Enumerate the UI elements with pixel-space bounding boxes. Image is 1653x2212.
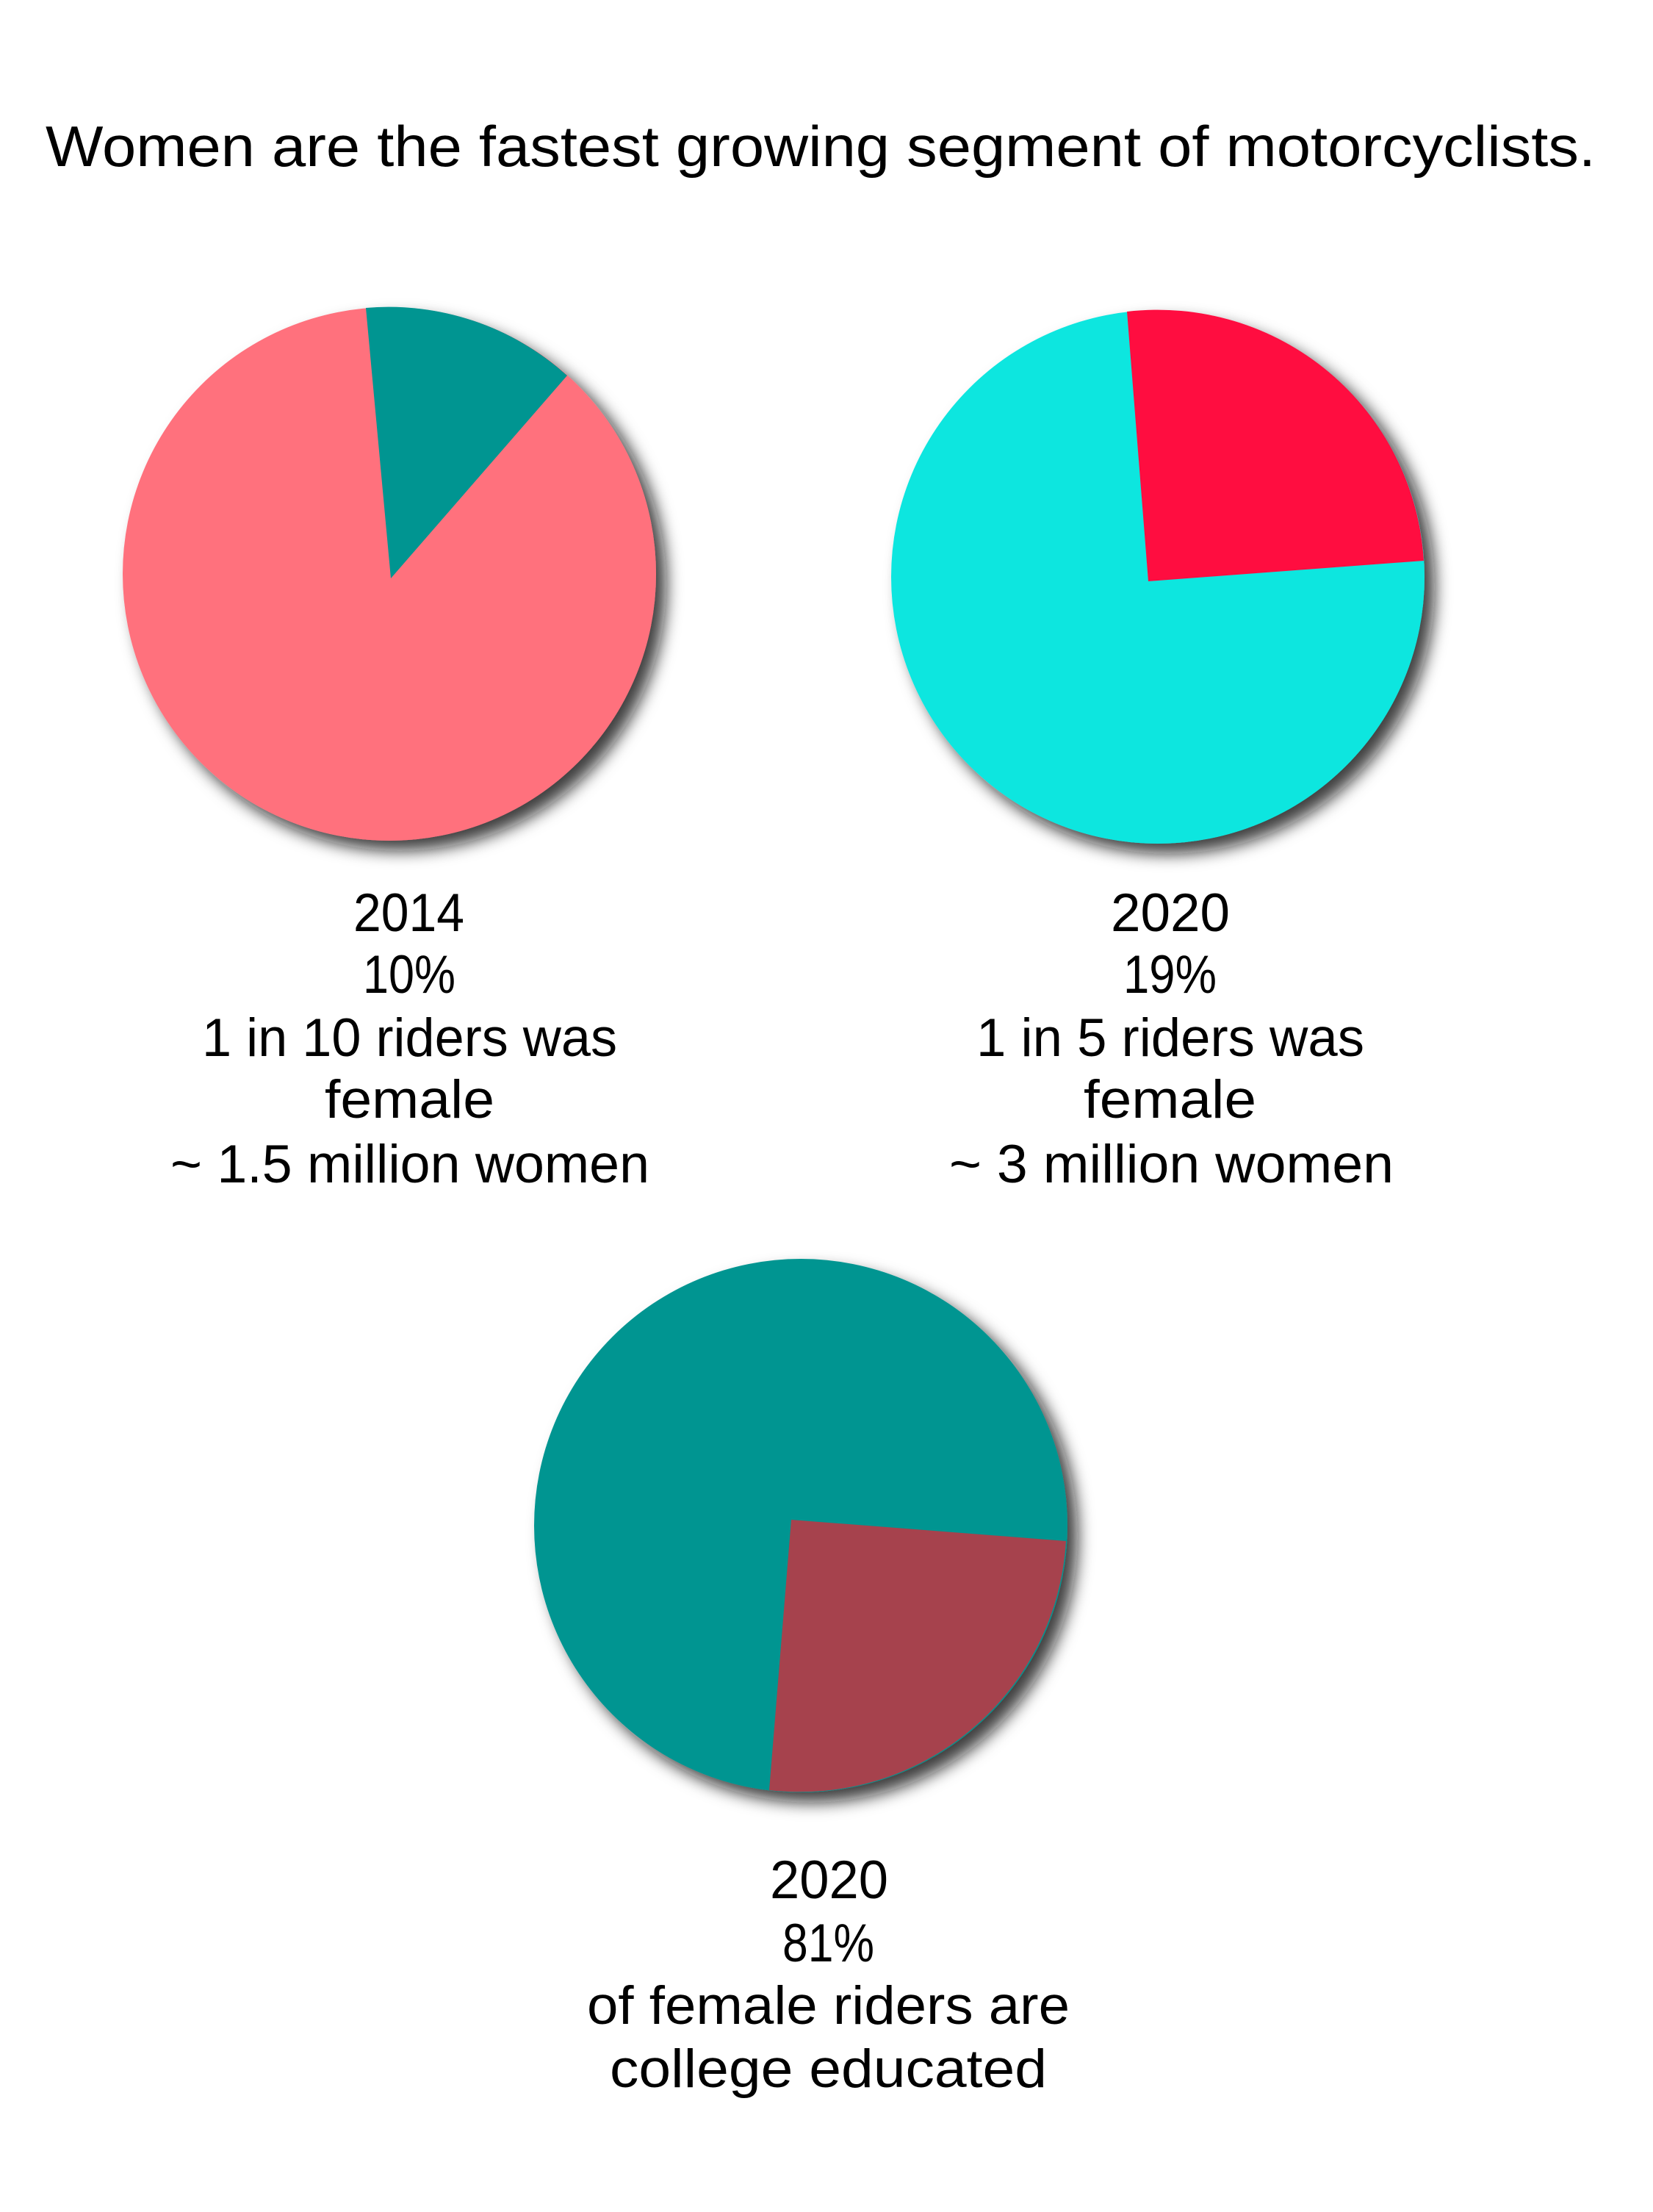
caption: 2020 riders: 1 in 5 riders was bbox=[976, 1008, 1364, 1068]
caption: 2020 riders bbox=[949, 883, 1394, 1194]
caption: college educated: 2020 bbox=[770, 1850, 888, 1910]
caption: 2020 riders: 19% bbox=[1123, 945, 1217, 1005]
title: Women are the fastest growing segment of motorcyclists. bbox=[46, 114, 1596, 179]
pie slice: male riders 2014 bbox=[123, 307, 656, 841]
caption: college educated: college educated bbox=[610, 2039, 1047, 2099]
pie slice: male riders 2020 bbox=[891, 310, 1425, 844]
caption: 2014 bbox=[170, 883, 649, 1194]
caption: college educated bbox=[587, 1850, 1070, 2099]
pie slice: not college educated bbox=[534, 1259, 1067, 1792]
panel: college education pie chart bbox=[534, 1259, 1067, 1792]
caption: 2014: ~ 1.5 million women bbox=[170, 1135, 649, 1194]
pie slice: female riders 2020 bbox=[1127, 310, 1424, 581]
panel: 2020 pie chart bbox=[891, 310, 1425, 844]
caption: 2014: female bbox=[325, 1070, 494, 1130]
pie slice: female riders 2014 bbox=[366, 307, 567, 578]
caption: college educated: of female riders are bbox=[587, 1976, 1070, 2036]
caption: 2014: 1 in 10 riders was bbox=[202, 1008, 617, 1068]
caption: 2020 riders: ~ 3 million women bbox=[949, 1135, 1394, 1194]
pie slice: college educated marker bbox=[769, 1520, 1066, 1792]
caption: 2014: 10% bbox=[363, 945, 455, 1005]
caption: 2014: 2014 bbox=[353, 883, 464, 943]
caption: 2020 riders: female bbox=[1084, 1070, 1256, 1130]
caption: 2020 riders: 2020 bbox=[1111, 883, 1230, 943]
caption: college educated: 81% bbox=[782, 1914, 874, 1973]
panel: 2014 pie chart bbox=[123, 307, 656, 841]
